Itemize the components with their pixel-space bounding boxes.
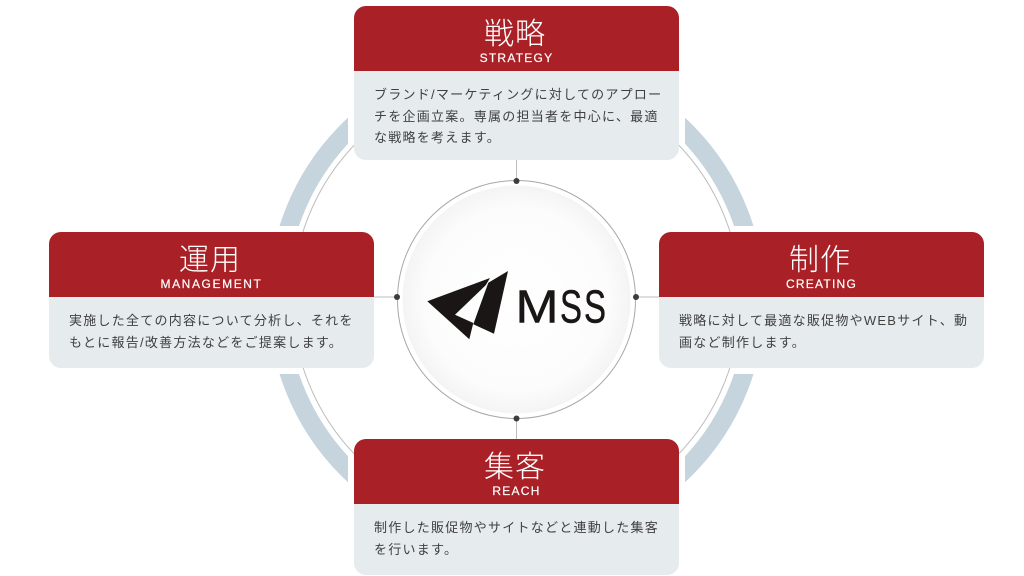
cycle diagram: arcs, rings and central logo <box>280 118 754 482</box>
connector dots <box>394 178 639 422</box>
central circle <box>398 180 636 418</box>
management heading: 運用 <box>179 235 241 279</box>
creating description <box>679 313 968 350</box>
panel: strategy <box>354 6 679 160</box>
strategy description: チを企画立案。専属の担当者を中心に、最適 <box>374 108 659 124</box>
strategy subtitle: STRATEGY <box>480 51 553 65</box>
creating description: 戦略に対して最適な販促物やWEBサイト、動 <box>679 313 968 328</box>
MSS logo <box>427 271 606 339</box>
panel: reach <box>354 439 679 575</box>
logo wordmark <box>516 281 606 333</box>
reach subtitle: REACH <box>492 484 541 498</box>
strategy description <box>374 87 662 145</box>
management subtitle: MANAGEMENT <box>160 277 262 291</box>
creating description: 画など制作します。 <box>679 334 806 350</box>
strategy header <box>354 6 679 71</box>
reach description: を行います。 <box>374 542 458 556</box>
logo wordmark: S <box>584 281 606 333</box>
panel: creating <box>659 232 984 368</box>
management description: 実施した全ての内容について分析し、それを <box>69 313 354 328</box>
connector lines <box>370 155 664 445</box>
strategy heading: 戦略 <box>484 9 546 53</box>
management description: もとに報告/改善方法などをご提案します。 <box>69 334 343 350</box>
strategy description: な戦略を考えます。 <box>374 130 501 145</box>
reach header <box>354 439 679 504</box>
management description <box>69 313 354 350</box>
logo wordmark: S <box>560 281 582 333</box>
management header <box>49 232 374 297</box>
reach description <box>374 520 659 556</box>
logo wordmark: M <box>516 281 558 333</box>
strategy description: ブランド/マーケティングに対してのアプロー <box>374 87 662 102</box>
outer thin ring <box>292 76 740 524</box>
creating header <box>659 232 984 297</box>
reach heading: 集客 <box>484 442 546 486</box>
creating subtitle: CREATING <box>786 277 857 291</box>
reach description: 制作した販促物やサイトなどと連動した集客 <box>374 520 659 535</box>
panel: management <box>49 232 374 368</box>
blue arc segments <box>280 118 754 482</box>
logo mark: paper plane <box>427 271 508 339</box>
creating heading: 制作 <box>789 235 851 279</box>
